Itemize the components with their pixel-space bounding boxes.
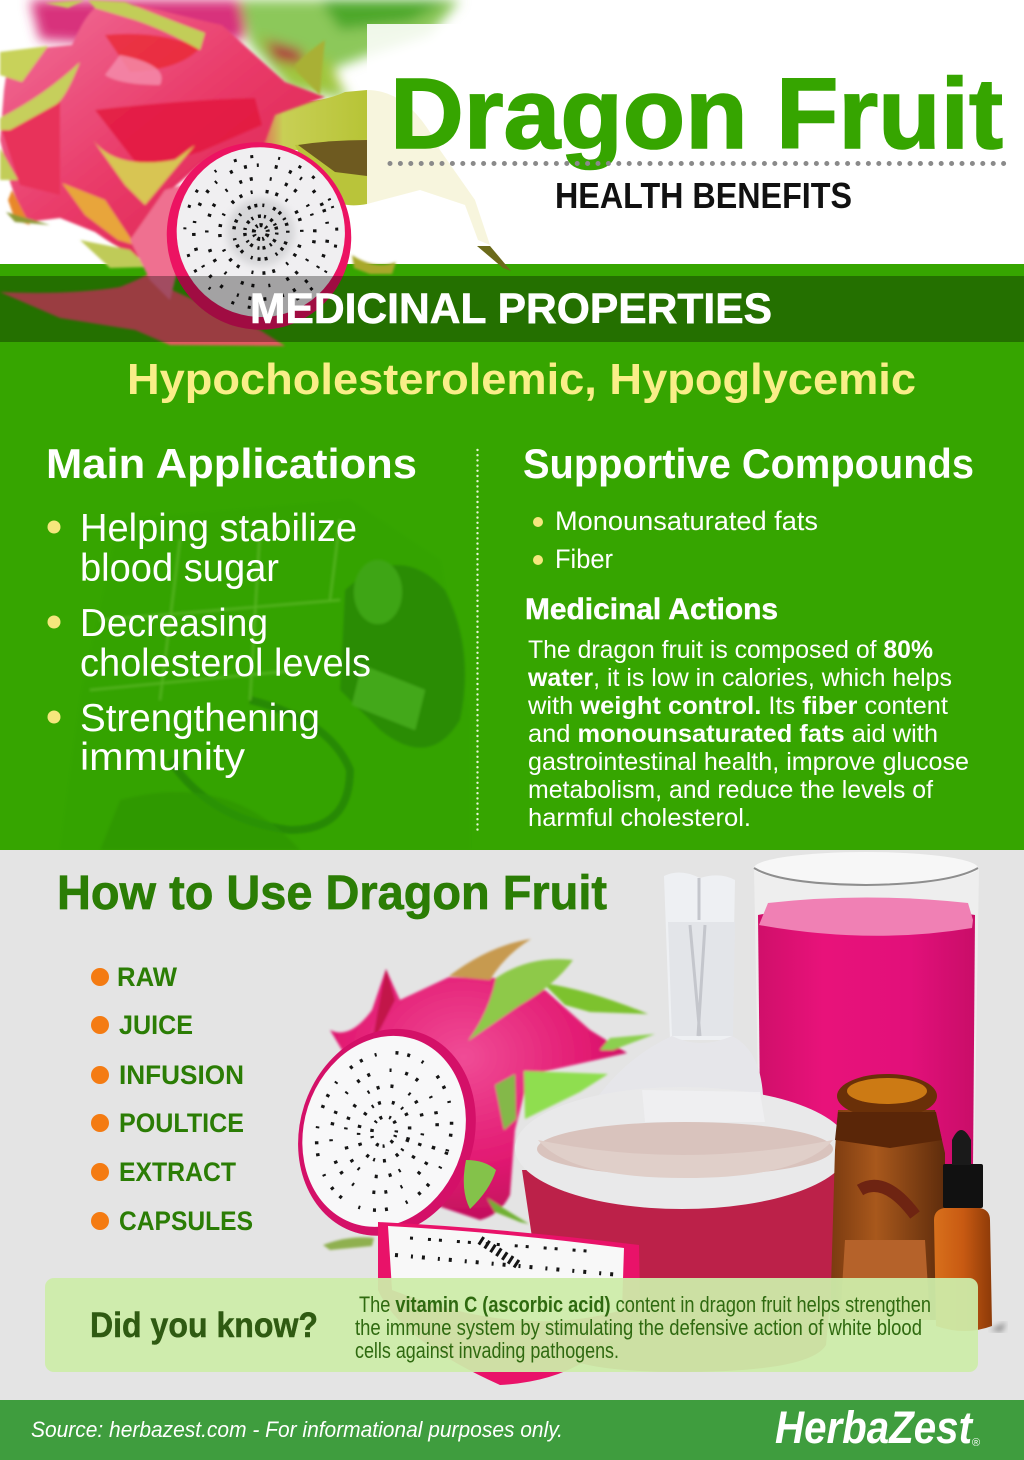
paragraph: medicinal actions: and monounsaturated fats aid with (528, 720, 938, 748)
product photo group (272, 852, 1006, 1385)
paragraph: medicinal actions (527, 636, 969, 832)
panel: supportive compounds (523, 440, 974, 832)
callout text: cells against invading pathogens. (355, 1338, 619, 1363)
list: forms of use: JUICE (119, 1010, 193, 1040)
bract on fruit (464, 1160, 496, 1209)
callout: did you know (45, 1278, 978, 1372)
bullet: cholesterol: Decreasing (80, 602, 268, 645)
callout text: The vitamin C (ascorbic acid) content in dragon fruit helps strengthen (359, 1292, 931, 1317)
slice of fruit (140, 116, 378, 356)
panel: how to use background (0, 850, 1024, 1400)
glass of juice (754, 852, 979, 1300)
source line: Source: herbazest.com - For informational purposes only. (31, 1417, 563, 1442)
title: Dragon Fruit (390, 58, 1003, 170)
subtitle: HEALTH BENEFITS (555, 175, 852, 216)
bullet: cholesterol (48, 602, 371, 685)
pale splash behind title (367, 90, 490, 245)
list: forms of use: INFUSION (119, 1060, 244, 1090)
list: forms of use: CAPSULES (119, 1206, 253, 1236)
list: forms of use: RAW (117, 962, 177, 992)
column divider (476, 450, 479, 832)
bullet: blood sugar (48, 507, 357, 590)
paragraph: medicinal actions: water, it is low in calories, which helps (527, 664, 952, 692)
heading: how to use: How to Use Dragon Fruit (57, 867, 607, 920)
dragon fruit body (323, 939, 655, 1250)
list: forms of use: EXTRACT (119, 1157, 236, 1187)
header blurred background fruit (30, 0, 460, 100)
dotted rule (390, 161, 1004, 166)
lower fruit slice (378, 1222, 640, 1385)
bullet: blood sugar: Helping stabilize (80, 507, 357, 550)
compound list: Fiber (555, 544, 613, 574)
bullet: cholesterol: cholesterol levels (80, 642, 371, 685)
footer (0, 1400, 1024, 1460)
scales (0, 46, 48, 82)
bullet: immunity: immunity (80, 736, 246, 779)
stem tip (477, 246, 511, 271)
heading: main applications: Main Applications (46, 440, 417, 487)
paragraph: medicinal actions: gastrointestinal health, improve glucose (528, 748, 969, 776)
callout text (355, 1292, 931, 1363)
bullet: immunity: Strengthening (80, 697, 320, 740)
translucent title panel (367, 24, 1024, 204)
stem and lower bract (255, 90, 367, 150)
poultice bag (599, 872, 763, 1095)
header photo: dragon fruit (0, 0, 396, 356)
lower fruit skin spike (0, 268, 285, 346)
fruit slice (272, 1006, 502, 1259)
list: forms of use (91, 962, 253, 1236)
paragraph: medicinal actions: metabolism, and reduce the levels of (528, 776, 933, 804)
panel: main applications (46, 440, 417, 779)
dropper bottle (934, 1130, 1006, 1332)
bullet: blood sugar: blood sugar (80, 547, 279, 590)
callout text: the immune system by stimulating the defensive action of white blood (355, 1315, 922, 1340)
paragraph: medicinal actions: The dragon fruit is composed of 80% (528, 636, 933, 664)
list: forms of use: POULTICE (119, 1108, 244, 1138)
fruit body (0, 5, 325, 262)
mug of infusion (515, 1087, 920, 1372)
logo: HerbaZest: ® (972, 1437, 980, 1449)
compound list (533, 506, 818, 574)
background photo: blood pressure cuff (60, 500, 470, 850)
dark band (0, 276, 1024, 342)
green medicinal panel background (0, 264, 1024, 850)
callout heading: Did you know? (90, 1306, 318, 1345)
bullet: immunity (48, 697, 320, 779)
subheading: Hypocholesterolemic, Hypoglycemic (127, 355, 916, 404)
paragraph: medicinal actions: harmful cholesterol. (528, 804, 751, 832)
amber capsule bottle (830, 1074, 945, 1320)
paragraph: medicinal actions: with weight control. Its fiber content (527, 692, 948, 720)
heading: supportive compounds: Supportive Compounds (523, 440, 974, 487)
heading: medicinal properties: MEDICINAL PROPERTIES (250, 285, 772, 333)
heading: medicinal actions: Medicinal Actions (525, 593, 778, 626)
compound list: Monounsaturated fats (555, 506, 818, 536)
logo: HerbaZest: HerbaZest (775, 1402, 974, 1453)
